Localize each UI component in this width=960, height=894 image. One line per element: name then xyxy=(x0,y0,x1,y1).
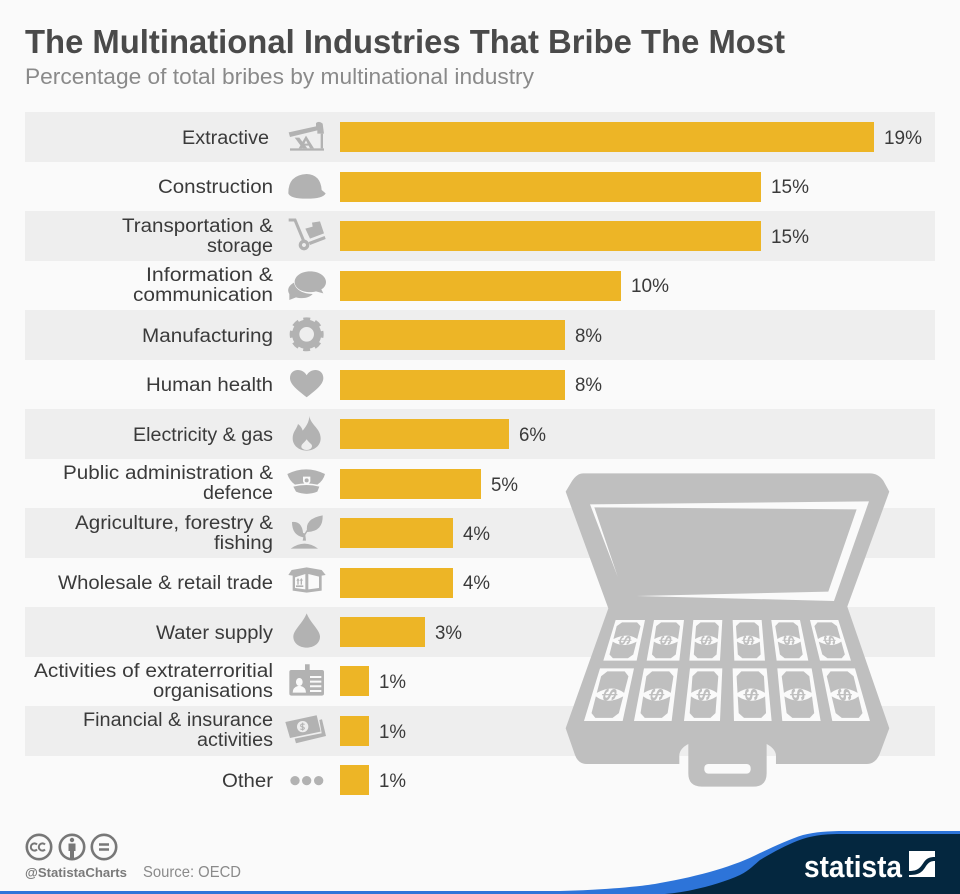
bar xyxy=(340,221,761,251)
icon: speech bubbles xyxy=(288,271,326,300)
icon: hand truck xyxy=(289,220,326,250)
label: Financial & insurance xyxy=(83,710,273,731)
label: Other xyxy=(222,771,274,792)
label: activities xyxy=(197,730,273,751)
bill xyxy=(609,622,641,658)
bar xyxy=(340,419,509,449)
value: 8% xyxy=(575,326,602,347)
row: Electricity & gas xyxy=(25,409,935,459)
icon: water drop xyxy=(293,613,320,648)
value: 15% xyxy=(771,177,809,198)
bill xyxy=(736,622,761,658)
subtitle: Percentage of total bribes by multinational industry xyxy=(25,64,534,89)
bar xyxy=(340,666,369,696)
icon: oil pump xyxy=(289,122,324,151)
value: 1% xyxy=(379,722,406,743)
label: Wholesale & retail trade xyxy=(58,573,273,594)
icon: box xyxy=(288,567,326,593)
value: 5% xyxy=(491,475,518,496)
bar xyxy=(340,518,453,548)
bill: $ xyxy=(693,688,714,702)
label: Manufacturing xyxy=(142,326,273,347)
label: fishing xyxy=(214,533,273,554)
row: Extractive xyxy=(25,112,935,162)
label: Construction xyxy=(158,177,273,198)
label: Transportation & xyxy=(122,216,273,237)
row: Information & communication xyxy=(133,265,669,306)
bar xyxy=(340,172,761,202)
value: 1% xyxy=(379,672,406,693)
bill xyxy=(813,622,846,658)
title: The Multinational Industries That Bribe The Most xyxy=(25,23,785,60)
bill: $ xyxy=(739,635,757,646)
row: Financial & insurance activities xyxy=(25,706,935,756)
value: 8% xyxy=(575,375,602,396)
bill xyxy=(826,671,864,718)
icon: flame xyxy=(293,416,321,451)
value: 4% xyxy=(463,573,490,594)
label: Public administration & xyxy=(63,463,273,484)
footer wave: blue xyxy=(0,831,960,894)
logo: statista wordmark: statista xyxy=(804,849,903,884)
bar xyxy=(340,320,565,350)
bill: $ xyxy=(697,635,715,646)
icon: sprout xyxy=(291,515,323,549)
bill xyxy=(694,622,719,658)
icon: ID badge xyxy=(289,664,324,696)
label: Information & xyxy=(146,265,273,286)
icon: heart xyxy=(290,370,323,397)
bill xyxy=(590,671,630,718)
bill: $ xyxy=(779,635,798,646)
value: 4% xyxy=(463,524,490,545)
bill: $ xyxy=(819,635,840,646)
bill: $ xyxy=(656,635,675,646)
row: Wholesale & retail trade xyxy=(58,567,490,598)
bill: $ xyxy=(740,688,761,701)
row: Agriculture, forestry & fishing xyxy=(25,508,935,558)
row: Construction xyxy=(158,172,809,202)
bill: $ xyxy=(832,688,856,701)
row: Public administration & defence xyxy=(63,463,518,504)
bar xyxy=(340,716,369,746)
logo: statista mark xyxy=(909,851,935,877)
bar xyxy=(340,122,874,152)
label: Agriculture, forestry & xyxy=(75,513,273,534)
bar xyxy=(340,765,369,795)
row: Activities of extraterroritial organisations xyxy=(34,661,406,702)
icon: gear xyxy=(292,319,322,349)
bar xyxy=(340,617,425,647)
bar xyxy=(340,370,565,400)
bill xyxy=(781,671,815,718)
value: 1% xyxy=(379,771,406,792)
icon: banknotes xyxy=(285,715,326,743)
row: Water supply xyxy=(25,607,935,657)
bill xyxy=(651,622,681,658)
label: Human health xyxy=(146,375,273,396)
icon: hard hat xyxy=(288,174,326,199)
label: storage xyxy=(207,236,273,257)
value: 19% xyxy=(884,128,922,149)
label: defence xyxy=(203,483,273,504)
handle: @StatistaCharts xyxy=(25,865,127,880)
bill xyxy=(736,671,766,718)
bill: $ xyxy=(645,688,668,701)
icon: open briefcase full of money xyxy=(566,473,889,787)
row: Transportation & storage xyxy=(25,211,935,261)
bar xyxy=(340,271,621,301)
row: Other xyxy=(222,765,406,795)
value: 6% xyxy=(519,425,546,446)
bar xyxy=(340,568,453,598)
bill: $ xyxy=(597,688,622,701)
row: Human health xyxy=(146,370,602,400)
value: 3% xyxy=(435,623,462,644)
icon: creative commons licence xyxy=(27,835,116,859)
label: communication xyxy=(133,285,273,306)
footer wave: navy xyxy=(665,834,960,894)
label: Water supply xyxy=(156,623,274,644)
icon: officer cap xyxy=(287,469,325,494)
label: Activities of extraterroritial xyxy=(34,661,273,682)
source: Source: OECD xyxy=(143,864,241,881)
bill: $ xyxy=(786,688,808,701)
label: Electricity & gas xyxy=(133,425,273,446)
value: 10% xyxy=(631,276,669,297)
row: Manufacturing xyxy=(25,310,935,360)
bill: $ xyxy=(614,635,636,646)
bill xyxy=(689,671,719,718)
bar xyxy=(340,469,481,499)
label: Extractive xyxy=(182,128,269,149)
icon: three dots xyxy=(290,776,323,785)
value: 15% xyxy=(771,227,809,248)
bill xyxy=(775,622,803,658)
label: organisations xyxy=(153,681,273,702)
bill xyxy=(640,671,674,718)
